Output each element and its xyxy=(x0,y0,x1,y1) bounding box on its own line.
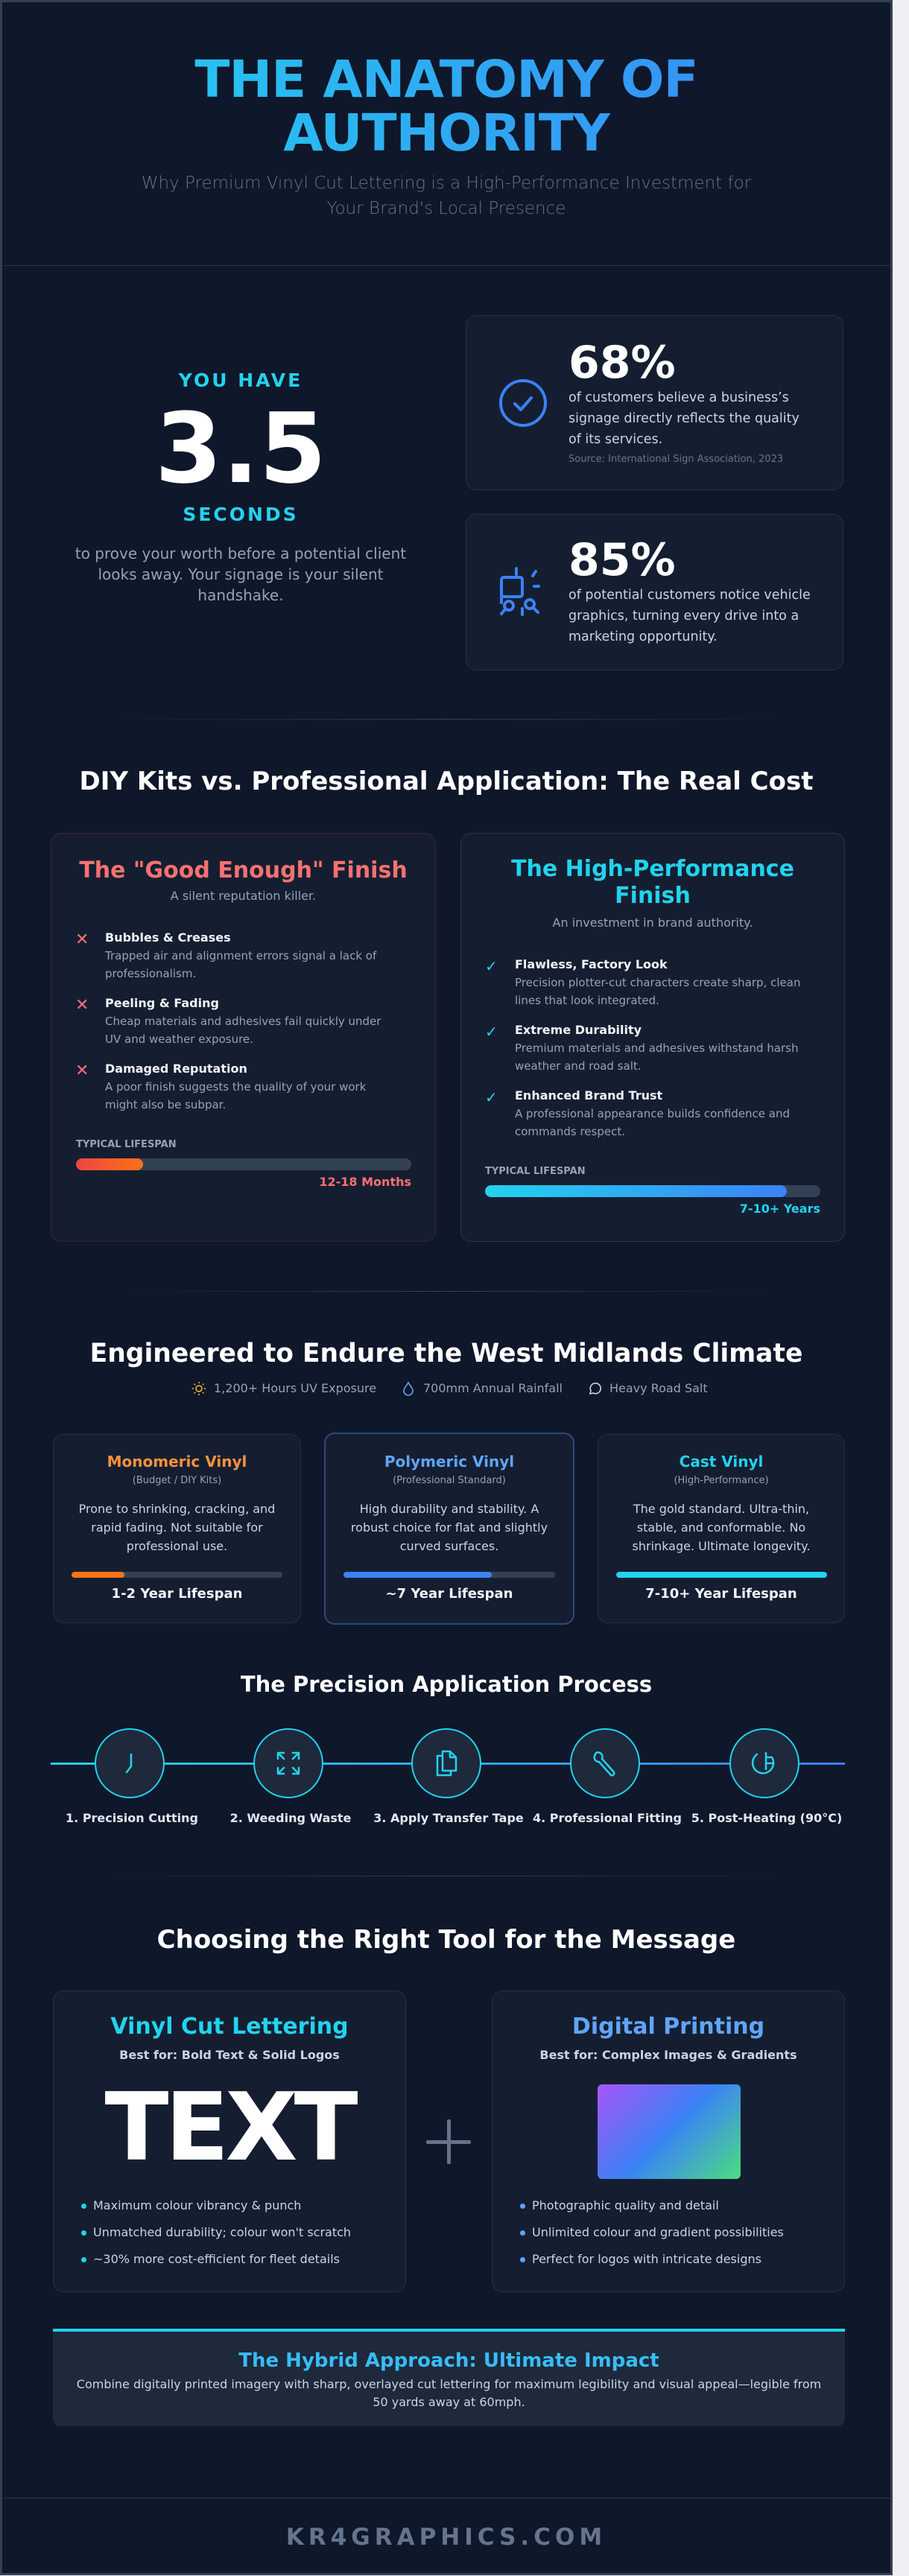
icon: sun xyxy=(192,1382,206,1395)
panel: good enough xyxy=(51,833,436,1242)
panel: good enough: ✕ xyxy=(75,996,89,1015)
card: cast: The gold standard. Ultra-thin, stable, and conformable. No shrinkage. Ultimate longevity. xyxy=(633,1502,810,1553)
card: cast: (High-Performance) xyxy=(674,1475,769,1486)
climate stats row: Heavy Road Salt xyxy=(609,1381,708,1395)
text: 5. Post-Heating (90°C) xyxy=(691,1811,842,1825)
panel: high-performance: The High-Performance xyxy=(511,856,794,882)
panel: vinyl cut: Maximum colour vibrancy & punch xyxy=(93,2198,301,2212)
card: polymeric xyxy=(324,1433,574,1625)
card: polymeric: High durability and stability. A robust choice for flat and slightly curved surfaces. xyxy=(351,1502,548,1553)
panel: vinyl cut: Unmatched durability; colour won't scratch xyxy=(93,2225,351,2239)
panel: good enough: The "Good Enough" Finish xyxy=(79,857,408,883)
stat: 3.5 seconds: 3.5 xyxy=(155,392,326,505)
panel: digital printing: Digital Printing xyxy=(572,2014,764,2040)
panel: good enough: 12-18 Months xyxy=(319,1175,411,1189)
panel: vinyl cut: ~30% more cost-efficient for fleet details xyxy=(93,2252,340,2266)
panel: good enough: ✕ xyxy=(75,1062,89,1080)
TEXT sample: TEXT xyxy=(104,2072,355,2182)
stat card 68%: Source: International Sign Association, 2023 xyxy=(568,454,783,465)
panel: good enough: Bubbles & Creases xyxy=(105,930,231,945)
heading: DIY vs pro: DIY Kits vs. Professional Application: The Real Cost xyxy=(80,767,813,796)
card: monomeric: (Budget / DIY Kits) xyxy=(133,1475,221,1486)
panel: digital printing xyxy=(492,1990,845,2292)
process timeline xyxy=(51,1763,845,1765)
panel: good enough: Cheap materials and adhesives fail quickly under UV and weather exposure. xyxy=(105,1015,381,1046)
heading: choosing tool: Choosing the Right Tool for the Message xyxy=(157,1925,735,1955)
callout: hybrid approach xyxy=(53,2329,845,2426)
subtitle: Why Premium Vinyl Cut Lettering is a High-Performance Investment for Your Brand's Local Presence xyxy=(142,174,751,218)
panel: high-performance: ✓ xyxy=(485,1088,498,1106)
step 3 xyxy=(411,1728,481,1798)
panel: digital printing: Photographic quality and detail xyxy=(532,2198,719,2212)
panel: digital printing: Unlimited colour and gradient possibilities xyxy=(532,2225,784,2239)
footer: KR4GRAPHICS.COM xyxy=(286,2524,606,2551)
callout: hybrid approach: Combine digitally printed imagery with sharp, overlayed cut lettering for maximum legibility and visual appeal—legible from 50 yards away at 60mph. xyxy=(77,2377,821,2409)
icon: plus xyxy=(426,2119,471,2164)
heading: process: The Precision Application Process xyxy=(241,1672,652,1697)
panel: good enough: Trapped air and alignment errors signal a lack of professionalism. xyxy=(105,949,376,980)
stat card 68%: 68% xyxy=(568,337,676,389)
card: polymeric: ~7 Year Lifespan xyxy=(386,1586,513,1602)
panel: high-performance: ✓ xyxy=(485,1023,498,1041)
header xyxy=(2,2,890,266)
panel: vinyl cut xyxy=(53,1990,406,2292)
panel: high-performance: 7-10+ Years xyxy=(740,1202,820,1216)
stat: 3.5 seconds: to prove your worth before a potential client looks away. Your signage is your silent handshake. xyxy=(75,545,406,604)
panel: high-performance: Precision plotter-cut characters create sharp, clean lines that look integrated. xyxy=(515,976,800,1007)
title xyxy=(2,53,890,160)
panel: high-performance: TYPICAL LIFESPAN xyxy=(485,1166,586,1177)
panel: digital printing: Best for: Complex Images & Gradients xyxy=(539,2048,797,2062)
stat: 3.5 seconds: YOU HAVE xyxy=(179,369,303,391)
climate stats row: 700mm Annual Rainfall xyxy=(423,1381,563,1395)
card: monomeric xyxy=(53,1434,301,1623)
panel: good enough: A silent reputation killer. xyxy=(171,889,316,903)
heading: climate: Engineered to Endure the West Midlands Climate xyxy=(90,1339,802,1368)
panel: high-performance: Finish xyxy=(615,883,691,909)
stat card 68% xyxy=(466,315,843,490)
icon: check circle xyxy=(499,379,547,427)
card: monomeric: 1-2 Year Lifespan xyxy=(112,1586,242,1602)
gradient swatch xyxy=(598,2084,741,2179)
panel: high-performance: Flawless, Factory Look xyxy=(515,957,668,971)
step 5 xyxy=(729,1728,799,1798)
stat: 3.5 seconds xyxy=(75,369,406,604)
stat card 85% xyxy=(466,514,843,670)
stat card 85%: 85% xyxy=(568,534,676,586)
stat: 3.5 seconds: SECONDS xyxy=(183,504,299,525)
panel: high-performance: ✓ xyxy=(485,957,498,975)
card: polymeric: (Professional Standard) xyxy=(393,1475,506,1486)
card: monomeric: Prone to shrinking, cracking, and rapid fading. Not suitable for professional use. xyxy=(79,1502,275,1553)
panel: high-performance xyxy=(460,833,845,1242)
icon: drop xyxy=(403,1381,414,1396)
panel: good enough: Peeling & Fading xyxy=(105,996,219,1010)
card: cast xyxy=(598,1434,845,1623)
text: 2. Weeding Waste xyxy=(230,1811,351,1825)
stat card 85%: of potential customers notice vehicle graphics, turning every drive into a marketing opportunity. xyxy=(568,588,811,644)
panel: good enough: A poor finish suggests the quality of your work might also be subpar. xyxy=(105,1080,366,1111)
panel: high-performance: Enhanced Brand Trust xyxy=(515,1088,662,1103)
title: THE ANATOMY OF xyxy=(194,50,698,110)
text: 4. Professional Fitting xyxy=(533,1811,682,1825)
footer xyxy=(2,2498,890,2575)
callout: hybrid approach: The Hybrid Approach: Ultimate Impact xyxy=(238,2350,659,2372)
panel: high-performance: Extreme Durability xyxy=(515,1023,642,1037)
title: AUTHORITY xyxy=(283,104,609,163)
panel: good enough: ✕ xyxy=(75,930,89,949)
panel: high-performance: An investment in brand authority. xyxy=(553,916,753,930)
panel: high-performance: A professional appearance builds confidence and commands respect. xyxy=(515,1107,790,1138)
panel: good enough: TYPICAL LIFESPAN xyxy=(76,1139,177,1150)
step 1 xyxy=(95,1728,165,1798)
card: cast: Cast Vinyl xyxy=(680,1453,763,1471)
panel: vinyl cut: Vinyl Cut Lettering xyxy=(110,2014,349,2040)
icon: salt xyxy=(589,1383,601,1395)
step labels: 1. Precision Cutting xyxy=(66,1811,198,1825)
card: monomeric: Monomeric Vinyl xyxy=(107,1453,247,1471)
step 2 xyxy=(253,1728,323,1798)
panel: good enough: Damaged Reputation xyxy=(105,1062,247,1076)
panel: vinyl cut: Best for: Bold Text & Solid Logos xyxy=(119,2048,340,2062)
step 4 xyxy=(570,1728,640,1798)
climate stats row: 1,200+ Hours UV Exposure xyxy=(214,1381,376,1395)
card: polymeric: Polymeric Vinyl xyxy=(384,1453,514,1471)
stat card 68%: of customers believe a business’s signage directly reflects the quality of its services. xyxy=(568,390,799,447)
icon: vehicle xyxy=(499,567,540,616)
card: cast: 7-10+ Year Lifespan xyxy=(645,1586,797,1602)
climate stats row xyxy=(192,1381,708,1396)
panel: digital printing: Perfect for logos with intricate designs xyxy=(532,2252,761,2266)
panel: high-performance: Premium materials and adhesives withstand harsh weather and road salt. xyxy=(515,1041,799,1073)
text: 3. Apply Transfer Tape xyxy=(373,1811,524,1825)
